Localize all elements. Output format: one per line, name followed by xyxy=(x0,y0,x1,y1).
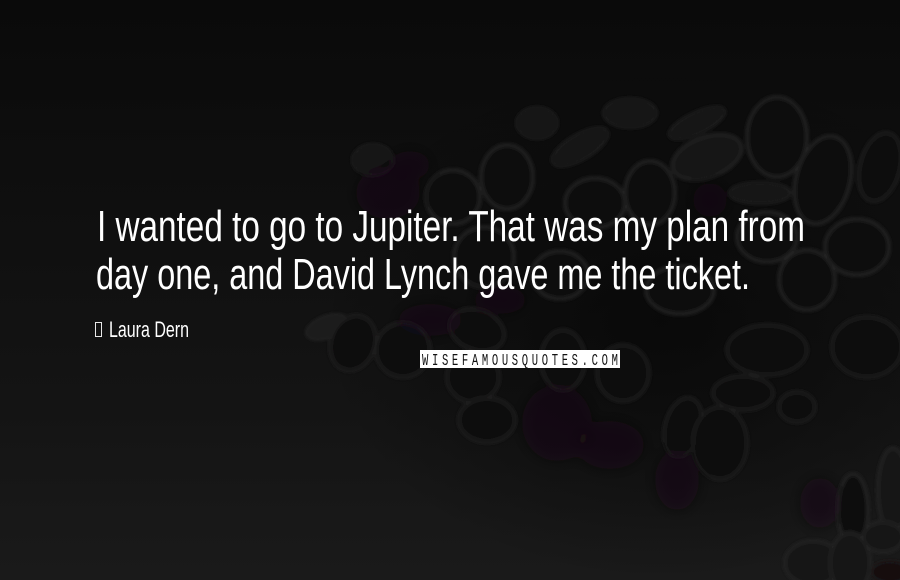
logo text: WISEFAMOUSQUOTES.COM xyxy=(422,352,618,371)
lower right petals xyxy=(597,317,900,479)
watermark logo xyxy=(420,350,620,371)
bottom right blossom xyxy=(785,448,900,580)
logo background xyxy=(420,350,620,368)
quote text xyxy=(96,202,805,299)
lilac flower cluster xyxy=(304,97,900,580)
upper petals xyxy=(353,97,900,314)
missing glyph box xyxy=(96,322,102,336)
faint red tinted blossoms xyxy=(356,151,840,528)
dark flower shadow xyxy=(320,60,900,580)
author name: Laura Dern xyxy=(109,317,189,342)
author attribution xyxy=(96,317,189,342)
lower left petals xyxy=(304,302,585,442)
